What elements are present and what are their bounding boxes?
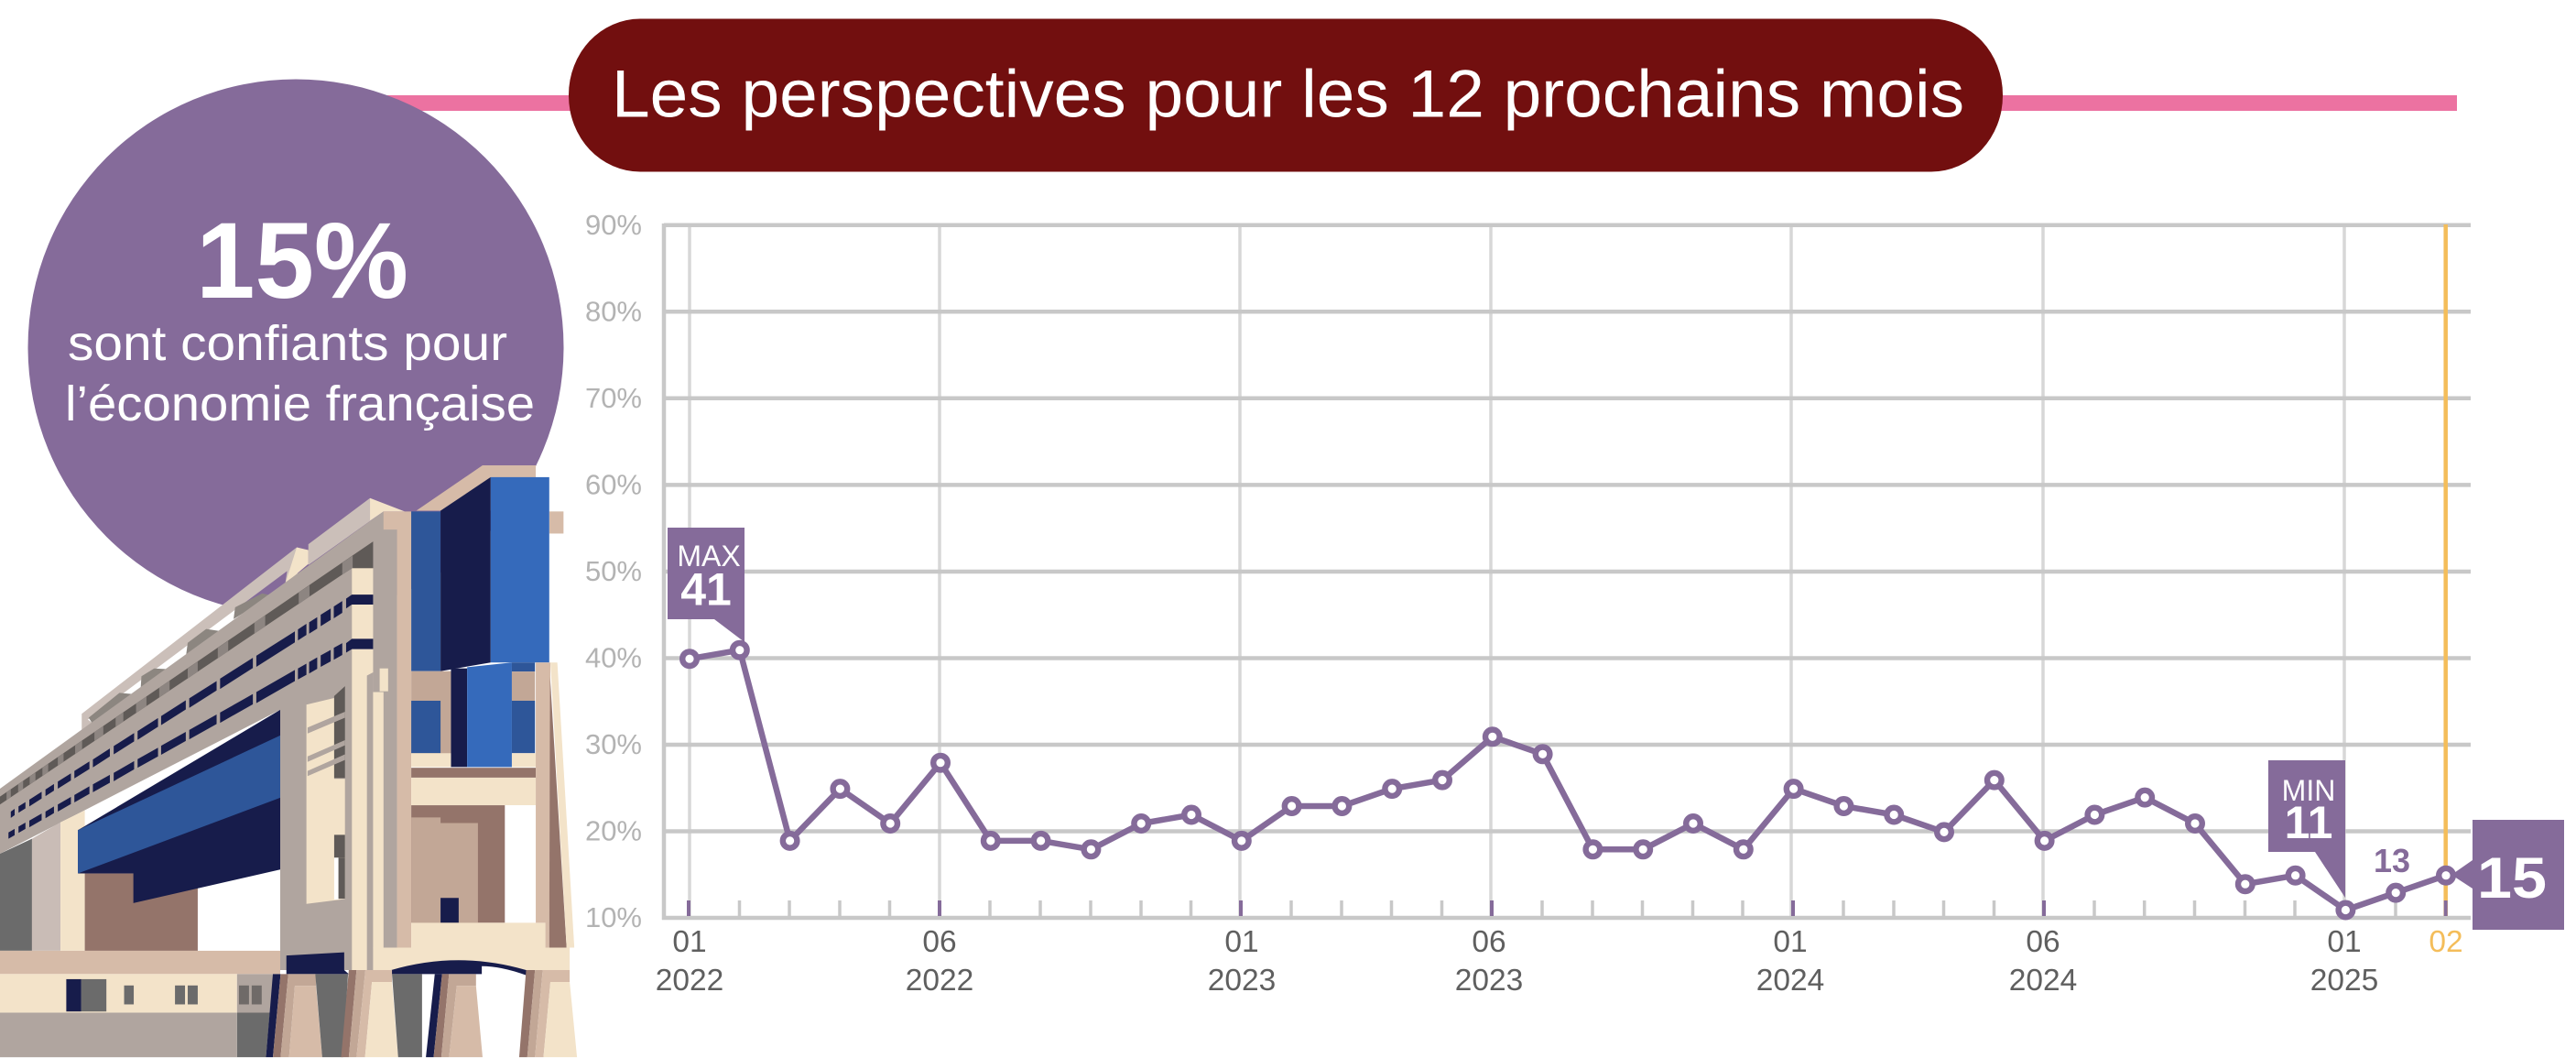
x axis labels: 2025 — [2310, 964, 2378, 998]
callout: latest value 15: 15 — [2477, 846, 2547, 911]
x axis labels: 01 — [1773, 925, 1808, 959]
x axis labels: 2022 — [656, 964, 723, 998]
y axis labels: 30% — [585, 728, 642, 760]
callout: min 11: MIN — [2282, 774, 2335, 807]
x axis labels: 2024 — [1756, 964, 1824, 998]
x axis labels: 02 — [2429, 925, 2463, 959]
x axis labels: 06 — [2026, 925, 2060, 959]
title pill: Les perspectives pour les 12 prochains mois — [612, 57, 1964, 132]
callout: max 41: MAX — [677, 540, 741, 573]
x axis labels: 06 — [1472, 925, 1506, 959]
y axis labels — [585, 209, 642, 933]
x axis labels: 2023 — [1208, 964, 1276, 998]
callout: min 11 — [2268, 760, 2345, 898]
x axis labels: 01 — [2327, 925, 2362, 959]
caption: confidence in French economy: l’économie française — [65, 376, 535, 431]
x axis labels: 06 — [922, 925, 957, 959]
x axis labels: 01 — [1224, 925, 1259, 959]
pink header rule — [387, 95, 2457, 111]
y axis labels: 60% — [585, 469, 642, 500]
y axis labels: 80% — [585, 295, 642, 328]
y axis labels: 90% — [585, 209, 642, 241]
y axis labels: 40% — [585, 641, 642, 674]
callout: max 41 — [668, 528, 745, 642]
title pill — [569, 18, 2003, 172]
month ticks — [689, 900, 2446, 918]
line chart: confidence over time — [585, 209, 2564, 998]
y axis labels: 50% — [585, 555, 642, 587]
caption: confidence in French economy — [65, 316, 535, 431]
value label: 13: 13 — [2374, 842, 2410, 879]
x axis labels — [656, 925, 2463, 998]
callout: latest value 15 — [2451, 820, 2564, 930]
x axis labels: 2023 — [1455, 964, 1523, 998]
building illustration: Bercy ministry — [0, 465, 577, 1057]
purple circle with headline figure — [27, 79, 564, 616]
data line — [690, 650, 2446, 911]
callout: max 41: 41 — [680, 564, 732, 616]
callout: min 11: 11 — [2285, 797, 2332, 848]
data point markers — [682, 643, 2453, 917]
x axis labels: 2024 — [2009, 964, 2077, 998]
y axis labels: 70% — [585, 382, 642, 414]
figure: 15%: 15% — [196, 201, 408, 322]
x axis labels: 01 — [672, 925, 707, 959]
y axis labels: 10% — [585, 901, 642, 933]
caption: confidence in French economy: sont confiants pour — [68, 316, 507, 371]
february 2025 highlight line — [2443, 224, 2448, 916]
y axis labels: 20% — [585, 815, 642, 846]
x axis labels: 2022 — [906, 964, 973, 998]
